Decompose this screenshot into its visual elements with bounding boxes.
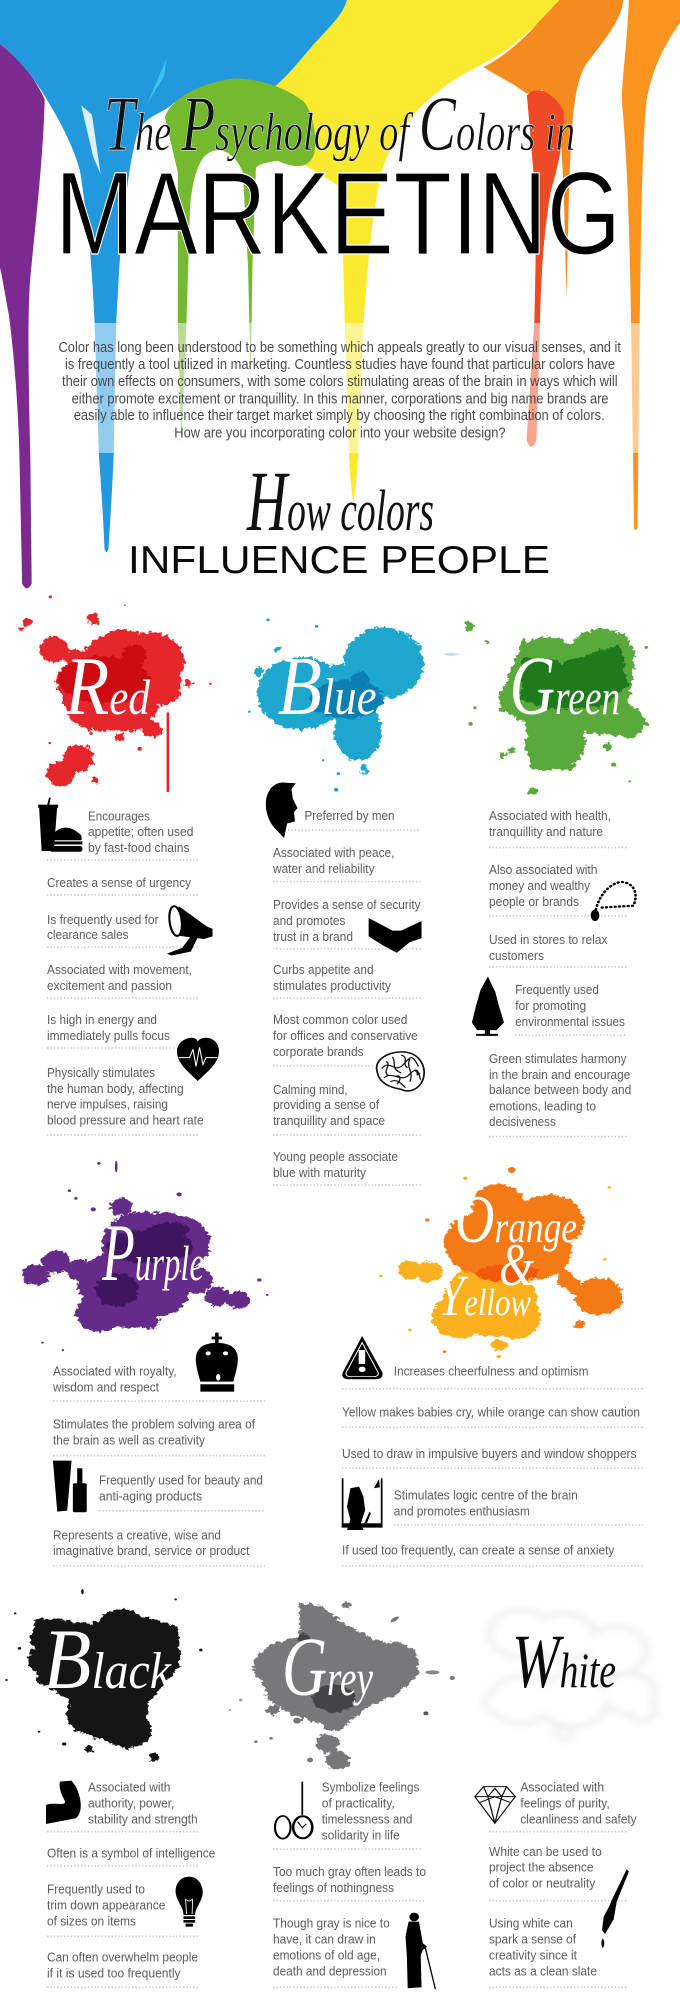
item [273,1082,421,1135]
intro paragraph: their own effects on consumers, with some colors stimulating areas of the brain in ways which will [62,374,618,390]
item [47,1882,199,1936]
item: Also associated with [489,862,597,877]
item: Associated with [88,1780,170,1795]
item: Associated with royalty, [53,1363,177,1378]
item: White can be used to [489,1844,602,1859]
panel: green [464,622,648,1136]
item: tranquillity and nature [489,824,603,839]
icon: old man with cane [406,1913,435,1989]
item: stimulates productivity [273,978,391,993]
splat: grey [229,1601,455,1769]
red paint [527,90,564,447]
item: Increases cheerfulness and optimism [394,1363,588,1378]
splat: purple [22,1161,268,1351]
splat title: Red: Red [64,640,151,733]
item [489,1051,631,1136]
item: money and wealthy [489,878,590,893]
icon: diamond [475,1787,515,1823]
item [489,1780,637,1832]
item [394,1488,643,1525]
item: the human body, affecting [47,1081,184,1096]
splat title: Purple: Purple [101,1207,204,1298]
item: of sizes on items [47,1913,136,1928]
item: Used to draw in impulsive buyers and window shoppers [342,1446,637,1461]
item: nerve impulses, raising [47,1097,168,1112]
item [288,808,421,830]
title [55,80,621,280]
icon: head [266,782,298,838]
blue highlight [81,105,101,174]
item [47,1012,176,1048]
item [273,1780,421,1849]
item: blue with maturity [273,1165,366,1180]
item: of color or neutrality [489,1876,596,1891]
item: emotions, leading to [489,1098,596,1114]
item: spark a sense of [489,1932,576,1947]
item: solidarity in life [322,1827,400,1842]
green paint [165,78,315,444]
splat: white [482,1607,658,1742]
item: blood pressure and heart rate [47,1113,204,1128]
item: immediately pulls focus [47,1028,170,1043]
panel: orange and yellow [342,1167,643,1566]
splat title: Orange & Yellow [438,1181,577,1328]
item: feelings of purity, [520,1796,610,1811]
item: wisdom and respect [52,1379,159,1394]
splat: green [464,622,648,796]
item: people or brands [489,894,579,909]
section heading caps: INFLUENCE PEOPLE [128,539,550,582]
item: and promotes [273,913,346,928]
section heading [128,453,550,582]
intro paragraph: is frequently a tool utilized in marketing. Countless studies have found that particular colors have [65,357,615,373]
splat title: Grey: Grey [282,1621,374,1714]
item: Creates a sense of urgency [47,875,191,890]
item: customers [489,948,544,963]
item: in the brain and encourage [489,1067,630,1082]
item: of practicality, [322,1796,395,1811]
item: Physically stimulates [47,1065,155,1080]
item: Associated with health, [489,808,611,823]
item: by fast-food chains [88,840,190,855]
intro paragraph: Color has long been understood to be something which appeals greatly to our visual senses, and it [58,340,621,356]
icon: megaphone [167,906,213,955]
panel: black [5,1589,215,1987]
intro background band [40,323,680,453]
icon: fast food [38,798,82,852]
splat title: White: White [512,1620,616,1704]
icon: brain [377,1052,424,1091]
item: feelings of nothingness [273,1880,394,1895]
item [515,982,627,1035]
item: Frequently used [515,982,599,997]
splat title: Blue: Blue [278,640,377,733]
icon: handshake [369,918,422,953]
blue streak [147,57,167,103]
item [52,1363,265,1401]
item: Provides a sense of security [273,897,421,912]
item: the brain as well as creativity [53,1433,205,1448]
item: Associated with [520,1780,604,1795]
item [489,808,627,848]
item: Most common color used [273,1012,407,1027]
icon: flexed arm [46,1781,81,1824]
intro paragraph: easily able to influence their target market simply by choosing the right combination of colors. [74,408,605,424]
item: Frequently used to [47,1882,145,1897]
item: environmental issues [515,1014,625,1029]
item: if it is used too frequently [47,1965,181,1980]
panel: purple [22,1161,268,1566]
splat title: Orange & Yellow: Orange [455,1181,577,1257]
panel: white [475,1607,658,1987]
orange paint [484,0,623,299]
item: Calming mind, [273,1082,348,1097]
yellow paint [260,0,559,501]
item: acts as a clean slate [489,1964,597,1979]
item: and promotes enthusiasm [394,1504,530,1519]
item [489,1844,627,1901]
item [272,845,421,882]
item: corporate brands [273,1044,364,1059]
item: creativity since it [489,1948,577,1963]
item: trust in a brand [273,929,353,944]
item: If used too frequently, can create a sense of anxiety [342,1542,615,1557]
icon: pocket watch [275,1782,312,1839]
item: balance between body and [489,1082,631,1097]
splat title: Black: Black [43,1611,172,1707]
item: Using white can [489,1916,573,1931]
icon: light bulb [176,1877,203,1927]
right orange paint [622,0,680,530]
icon: tree [472,977,504,1036]
item: timelessness and [322,1812,412,1827]
intro paragraph [58,340,621,441]
item: death and depression [273,1964,387,1979]
item [489,862,627,916]
section heading script: How colors [246,453,434,549]
item: Symbolize feelings [322,1780,420,1795]
item: trim down appearance [47,1898,165,1913]
item: Though gray is nice to [273,1916,390,1931]
icon: beads [591,882,636,921]
icon: bottles [53,1461,87,1512]
panel: red [18,595,219,1135]
item: appetite; often used [88,824,193,839]
item: Curbs appetite and [273,962,374,977]
item: imaginative brand, service or product [53,1543,250,1558]
item: Young people associate [273,1149,398,1164]
item [99,1472,265,1511]
icon: window shoppers [342,1478,383,1530]
item: clearance sales [47,927,129,942]
item: Stimulates logic centre of the brain [394,1488,578,1503]
splat title: Green: Green [510,640,620,733]
item: excitement and passion [47,978,172,993]
title script line: The Psychology of Colors in [104,80,575,167]
item: Yellow makes babies cry, while orange can show caution [342,1404,640,1419]
purple paint [0,44,45,588]
item [47,1780,199,1832]
item: Often is a symbol of intelligence [47,1845,215,1860]
panel: blue [248,618,458,1185]
item: anti-aging products [99,1488,202,1503]
item [489,932,627,967]
item [53,1527,265,1566]
intro paragraph: either promote excitement or tranquillity. In this manner, corporations and big name brands are [72,391,609,407]
item: Is high in energy and [47,1012,157,1027]
blue paint [0,0,347,552]
item [273,1012,418,1066]
item [47,912,199,947]
item: Encourages [88,808,150,823]
item: for promoting [515,998,586,1013]
item [47,808,199,860]
item: Frequently used for beauty and [99,1472,263,1487]
icon: warning [342,1336,383,1379]
splat title: Orange & Yellow: & [499,1232,534,1298]
splat title: Orange & Yellow: Yellow [438,1263,532,1328]
item: Too much gray often leads to [273,1864,426,1879]
splat: red [18,595,212,792]
item: have, it can draw in [273,1932,376,1947]
icon: heart [177,1038,219,1081]
item: emotions of old age, [273,1948,380,1963]
item: stability and strength [88,1812,198,1827]
item: Preferred by men [304,808,394,823]
splat: orange and yellow [379,1167,623,1358]
item: Green stimulates harmony [489,1051,627,1066]
item: cleanliness and safety [520,1812,637,1827]
panel: grey [229,1601,455,1989]
item: Stimulates the problem solving area of [53,1417,255,1432]
item: Represents a creative, wise and [53,1527,221,1542]
item [273,962,421,998]
item: Can often overwhelm people [47,1949,198,1964]
item: Associated with movement, [47,962,192,977]
item: for offices and conservative [273,1028,418,1043]
item [47,1949,199,1987]
item: Is frequently used for [47,912,159,927]
splat: black [5,1589,203,1762]
item: water and reliability [272,861,375,876]
item [47,962,199,998]
item: decisiveness [489,1114,556,1129]
item [47,1065,204,1135]
item [273,897,421,949]
item: authority, power, [88,1796,174,1811]
item [489,1916,627,1987]
icon: paint brush [601,1869,629,1948]
item: Associated with peace, [273,845,394,860]
item [273,1864,426,1901]
intro paragraph: How are you incorporating color into your website design? [174,425,506,441]
item [273,1149,421,1185]
icon: crown [196,1333,238,1392]
item: tranquillity and space [273,1113,385,1128]
splat: blue [248,618,458,792]
item: project the absence [489,1860,594,1875]
item [53,1417,265,1456]
paint drips header art [0,0,680,588]
item: Used in stores to relax [489,932,608,947]
item [273,1916,397,1987]
item: providing a sense of [273,1097,379,1112]
